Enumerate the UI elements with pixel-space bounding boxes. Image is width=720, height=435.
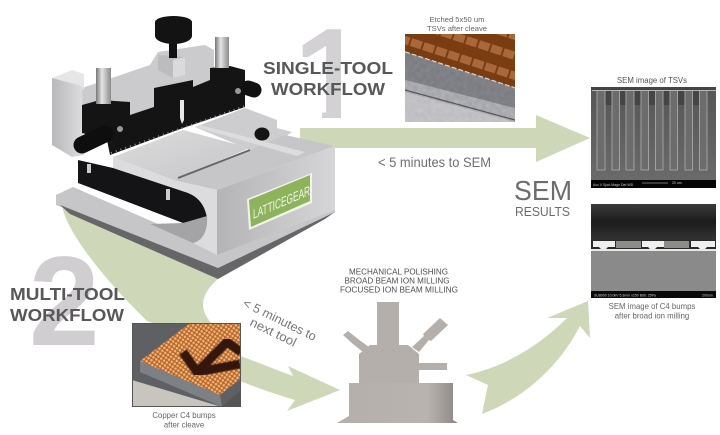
arrow: multi-tool workflow swoosh (62, 205, 340, 411)
heading: single-tool workflow (263, 58, 393, 99)
numeral 1: 1 (293, 0, 372, 158)
label: 5 minutes to next tool: < 5 minutes to (241, 296, 319, 344)
caption: copper C4 bumps (152, 411, 216, 430)
arrow: to SEM results (466, 301, 590, 414)
label: 5 minutes to next tool: next tool (248, 315, 299, 350)
left pin (96, 68, 111, 104)
photo: copper C4 bumps (132, 323, 241, 407)
label: SEM results: SEM (514, 175, 572, 206)
groove (178, 150, 250, 178)
right pin (215, 37, 229, 68)
rear block (82, 45, 214, 118)
right table plate (195, 108, 292, 150)
front face (113, 157, 217, 255)
thumb screw (254, 128, 270, 140)
left block (52, 70, 84, 90)
caption: SEM image of C4 bumps: after broad ion milling (615, 312, 689, 320)
T-bar (195, 125, 305, 156)
main top surface (173, 135, 335, 190)
SEM image: TSVs: 20 um (672, 181, 682, 185)
column (377, 302, 399, 347)
heading: multi-tool workflow (10, 284, 125, 325)
knob stem (169, 42, 177, 58)
caption: etched TSVs: Etched 5x50 um (430, 15, 484, 24)
left port arm (343, 331, 369, 352)
blade (180, 100, 184, 124)
right handle (248, 88, 254, 90)
left table plate (113, 130, 250, 180)
base (337, 383, 458, 423)
slider block (158, 55, 185, 78)
ruler teeth (111, 106, 245, 153)
black bar (82, 66, 245, 155)
caption: etched TSVs: TSVs after cleave (427, 24, 487, 33)
left handle (82, 134, 105, 145)
photo: etched TSVs (405, 34, 515, 122)
caption: SEM image of C4 bumps (609, 302, 695, 320)
arrow: single-tool workflow (300, 115, 590, 162)
caption: SEM image of TSVs: SEM image of TSVs (617, 76, 687, 85)
side port (419, 363, 447, 370)
heading: multi-tool workflow: MULTI-TOOL (10, 284, 125, 304)
clip pins (166, 189, 170, 200)
icon: milling tool (337, 302, 458, 423)
logo text: LATTICEGEAR (253, 183, 310, 222)
SEM image: C4 bumps: 200um (702, 294, 713, 298)
caption: SEM image of C4 bumps: SEM image of C4 bumps (609, 302, 695, 311)
chamber (359, 345, 419, 383)
device: LatticeGear cleaving tool (52, 16, 335, 279)
label: SEM results (514, 175, 572, 219)
label: SEM results: RESULTS (515, 204, 570, 219)
caption: copper C4 bumps: after cleave (164, 420, 204, 430)
label: other tool methods: MECHANICAL POLISHING (349, 268, 448, 276)
right port arm (412, 318, 448, 352)
logo plate (247, 173, 312, 230)
black interior (78, 160, 207, 223)
heading: single-tool workflow: WORKFLOW (271, 79, 386, 99)
right face (217, 146, 335, 255)
label: other tool methods: FOCUSED ION BEAM MILLING (340, 286, 458, 294)
SEM image: TSVs (591, 87, 716, 188)
screw heads (117, 126, 123, 132)
heading: multi-tool workflow: WORKFLOW (10, 305, 125, 325)
SEM image: C4 bumps (591, 204, 716, 298)
heading: single-tool workflow: SINGLE-TOOL (263, 58, 393, 78)
caption: etched TSVs (427, 15, 487, 33)
knob (155, 16, 192, 44)
numeral 2: 2 (29, 230, 100, 372)
label: other tool methods: BROAD BEAM ION MILLING (344, 276, 450, 286)
base plate (56, 187, 335, 268)
SEM image: C4 bumps: SU8000 10.0kV 5.3mm x250 BSE 25Pa (594, 294, 656, 298)
label: 5 minutes to SEM: < 5 minutes to SEM (378, 155, 491, 170)
SEM image: TSVs: Acc.V Spot Magn Det WD (593, 183, 634, 187)
interior floor (150, 216, 207, 243)
caption: copper C4 bumps: Copper C4 bumps (152, 411, 216, 420)
label: other tool methods (340, 268, 458, 294)
